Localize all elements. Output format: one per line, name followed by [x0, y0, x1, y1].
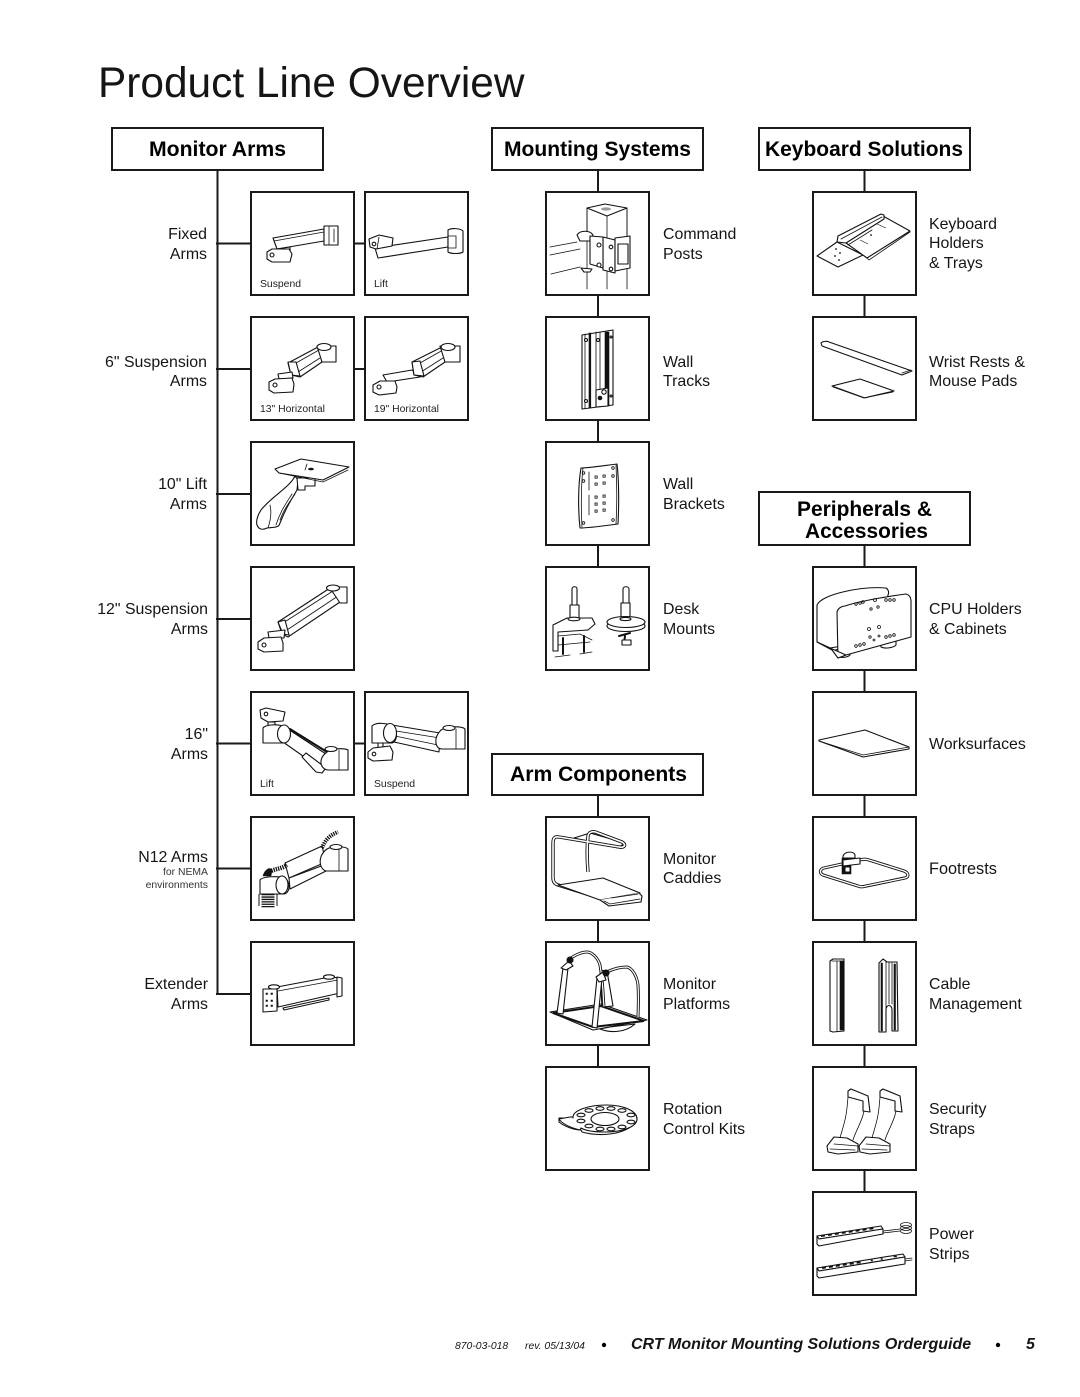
connector tree: monitor arms: [216, 170, 365, 995]
tile: 12 inch suspension arm: [251, 567, 354, 670]
label: 12" Suspension Arms: 12" Suspension: [97, 601, 208, 618]
label: Desk Mounts: Desk: [663, 601, 699, 618]
tile: fixed arm lift: [365, 192, 468, 295]
tile: desk mounts: [546, 567, 649, 670]
icon: wall bracket: [579, 464, 619, 528]
tile: security straps: [813, 1067, 916, 1170]
footer: page number: 5: [1026, 1336, 1036, 1353]
label: Keyboard Holders & Trays: & Trays: [929, 255, 983, 272]
label: Wrist Rests & Mouse Pads: Mouse Pads: [929, 373, 1017, 390]
heading: Monitor Arms: [112, 128, 323, 170]
label: N12 Arms: N12 Arms: [138, 849, 208, 866]
note: for NEMA environments: environments: [146, 880, 208, 891]
label: Extender Arms: Arms: [171, 996, 208, 1013]
label: Monitor Caddies: Caddies: [663, 870, 721, 887]
heading: Arm Components: [492, 754, 703, 795]
caption: Lift: Lift: [260, 779, 274, 790]
panel: Monitor Arms: [97, 128, 468, 1045]
tile: footrests: [813, 817, 916, 920]
caption: 19" Horizontal: 19" Horizontal: [374, 404, 439, 415]
tile: 6 inch suspension 19 horizontal: [365, 317, 468, 420]
icon: CPU holder: [817, 588, 911, 658]
label: Security Straps: Security: [929, 1101, 986, 1118]
label: 16" Arms: 16": [185, 726, 208, 743]
tile: CPU holders: [813, 567, 916, 670]
icon: 13 inch horizontal arm: [269, 344, 336, 393]
heading: Keyboard Solutions: [759, 128, 970, 170]
icon: keyboard tray: [817, 214, 910, 267]
tile: worksurfaces: [813, 692, 916, 795]
footer: guide title: CRT Monitor Mounting Solutions Orderguide: [631, 1336, 971, 1353]
label: Extender Arms: Extender: [144, 976, 208, 993]
icon: 10 inch lift arm: [257, 459, 349, 529]
tile: extender arm: [251, 942, 354, 1045]
caption: Suspend: Suspend: [260, 279, 301, 290]
label: Worksurfaces: Worksurfaces: [929, 736, 1026, 753]
label: Fixed Arms: Fixed: [168, 226, 207, 243]
icon: 12 inch suspension arm: [258, 585, 347, 652]
label: 10" Lift Arms: Arms: [170, 496, 207, 513]
label: Fixed Arms: Arms: [170, 246, 207, 263]
label: Keyboard Holders & Trays: Holders: [929, 235, 984, 252]
label: Wall Brackets: Brackets: [663, 496, 725, 513]
label: Monitor Platforms: Monitor: [663, 976, 716, 993]
icon: rotation control disc: [559, 1105, 637, 1135]
tile: wall brackets: [546, 442, 649, 545]
icon: wall track: [582, 330, 613, 409]
label: Wrist Rests & Mouse Pads: Wrist Rests &: [929, 354, 1025, 371]
heading: Peripherals & Accessories: [759, 492, 970, 545]
tile: cable management: [813, 942, 916, 1045]
icon: security straps: [827, 1089, 902, 1154]
heading: Mounting Systems: [492, 128, 703, 170]
connector: peripherals: [864, 545, 866, 1192]
tile: 16 inch lift arm: [251, 692, 354, 795]
heading: Monitor Arms: Monitor Arms: [149, 138, 286, 161]
footer: document number and revision: rev. 05/13/04: [525, 1341, 585, 1352]
label: Rotation Control Kits: Rotation: [663, 1101, 722, 1118]
tile: 16 inch suspend arm: [365, 692, 468, 795]
label: Power Strips: Power: [929, 1226, 974, 1243]
connector: keyboard solutions: [864, 170, 866, 317]
label: Monitor Caddies: Monitor: [663, 851, 716, 868]
heading: Peripherals & Accessories: Peripherals &: [797, 498, 932, 521]
footer: bullet: [602, 1343, 606, 1347]
label: 6" Suspension Arms: 6" Suspension: [105, 354, 207, 371]
icon: monitor caddy: [553, 832, 642, 906]
title: Product Line Overview: [98, 59, 525, 106]
tile: power strips: [813, 1192, 916, 1295]
panel: Keyboard Solutions: [759, 128, 1025, 420]
label: Desk Mounts: Mounts: [663, 621, 715, 638]
label: Command Posts: Command: [663, 226, 736, 243]
icon: cable channels: [830, 959, 898, 1032]
icon: extender arm: [263, 975, 342, 1012]
icon: footrest: [820, 852, 908, 887]
footer: bullet: [996, 1343, 1000, 1347]
heading: Mounting Systems: Mounting Systems: [504, 138, 691, 161]
tile: wall tracks: [546, 317, 649, 420]
label: 16" Arms: Arms: [171, 746, 208, 763]
icon: monitor platform: [550, 952, 647, 1032]
caption: Lift: Lift: [374, 279, 388, 290]
tile: rotation control kits: [546, 1067, 649, 1170]
tile: wrist rests and mouse pads: [813, 317, 916, 420]
label: Wall Tracks: Tracks: [663, 373, 710, 390]
heading: Arm Components: Arm Components: [510, 763, 687, 786]
label: Wall Brackets: Wall: [663, 476, 693, 493]
panel: Mounting Systems: [492, 128, 736, 670]
label: 10" Lift Arms: 10" Lift: [158, 476, 207, 493]
label: CPU Holders & Cabinets: & Cabinets: [929, 621, 1007, 638]
icon: worksurface: [819, 730, 909, 757]
icon: fixed suspend arm: [267, 226, 338, 262]
tile: monitor platforms: [546, 942, 649, 1045]
footer: document number and revision: 870-03-018: [455, 1341, 508, 1352]
icon: desk mounts: [553, 587, 645, 657]
panel: Arm Components: [492, 754, 745, 1170]
tile: monitor caddies: [546, 817, 649, 920]
heading: Peripherals & Accessories: Accessories: [805, 520, 928, 543]
icon: 16 inch lift arm: [260, 708, 348, 773]
icon: N12 arm with hose: [259, 832, 348, 908]
tile: fixed arm suspend: [251, 192, 354, 295]
panel: Peripherals & Accessories: [759, 492, 1026, 1295]
tile: keyboard holders: [813, 192, 916, 295]
tile: N12 arm: [251, 817, 354, 920]
tile: 6 inch suspension 13 horizontal: [251, 317, 354, 420]
label: Wall Tracks: Wall: [663, 354, 693, 371]
label: Cable Management: Cable: [929, 976, 971, 993]
icon: wrist rest and mouse pad: [821, 341, 912, 398]
label: Power Strips: Strips: [929, 1246, 970, 1263]
icon: command post: [550, 204, 630, 289]
label: Command Posts: Posts: [663, 246, 703, 263]
caption: 13" Horizontal: 13" Horizontal: [260, 404, 325, 415]
tile: command posts: [546, 192, 649, 295]
label: Footrests: Footrests: [929, 860, 997, 878]
note: for NEMA environments: for NEMA: [163, 867, 208, 878]
icon: power strips: [817, 1222, 912, 1278]
tile: 10 inch lift arm: [251, 442, 354, 545]
label: Security Straps: Straps: [929, 1121, 975, 1138]
label: Keyboard Holders & Trays: Keyboard: [929, 216, 997, 233]
connector: arm components: [597, 795, 599, 1067]
icon: fixed lift arm: [369, 229, 463, 258]
icon: 16 inch suspend arm: [368, 723, 465, 761]
connector: mounting systems: [597, 170, 599, 567]
caption: Suspend: Suspend: [374, 779, 415, 790]
label: 6" Suspension Arms: Arms: [170, 373, 207, 390]
label: 12" Suspension Arms: Arms: [171, 621, 208, 638]
label: Monitor Platforms: Platforms: [663, 996, 730, 1013]
label: Rotation Control Kits: Control Kits: [663, 1121, 745, 1138]
label: CPU Holders & Cabinets: CPU Holders: [929, 601, 1022, 618]
label: Cable Management: Management: [929, 996, 1022, 1013]
heading: Keyboard Solutions: Keyboard Solutions: [765, 138, 963, 161]
icon: 19 inch horizontal arm: [373, 344, 460, 395]
